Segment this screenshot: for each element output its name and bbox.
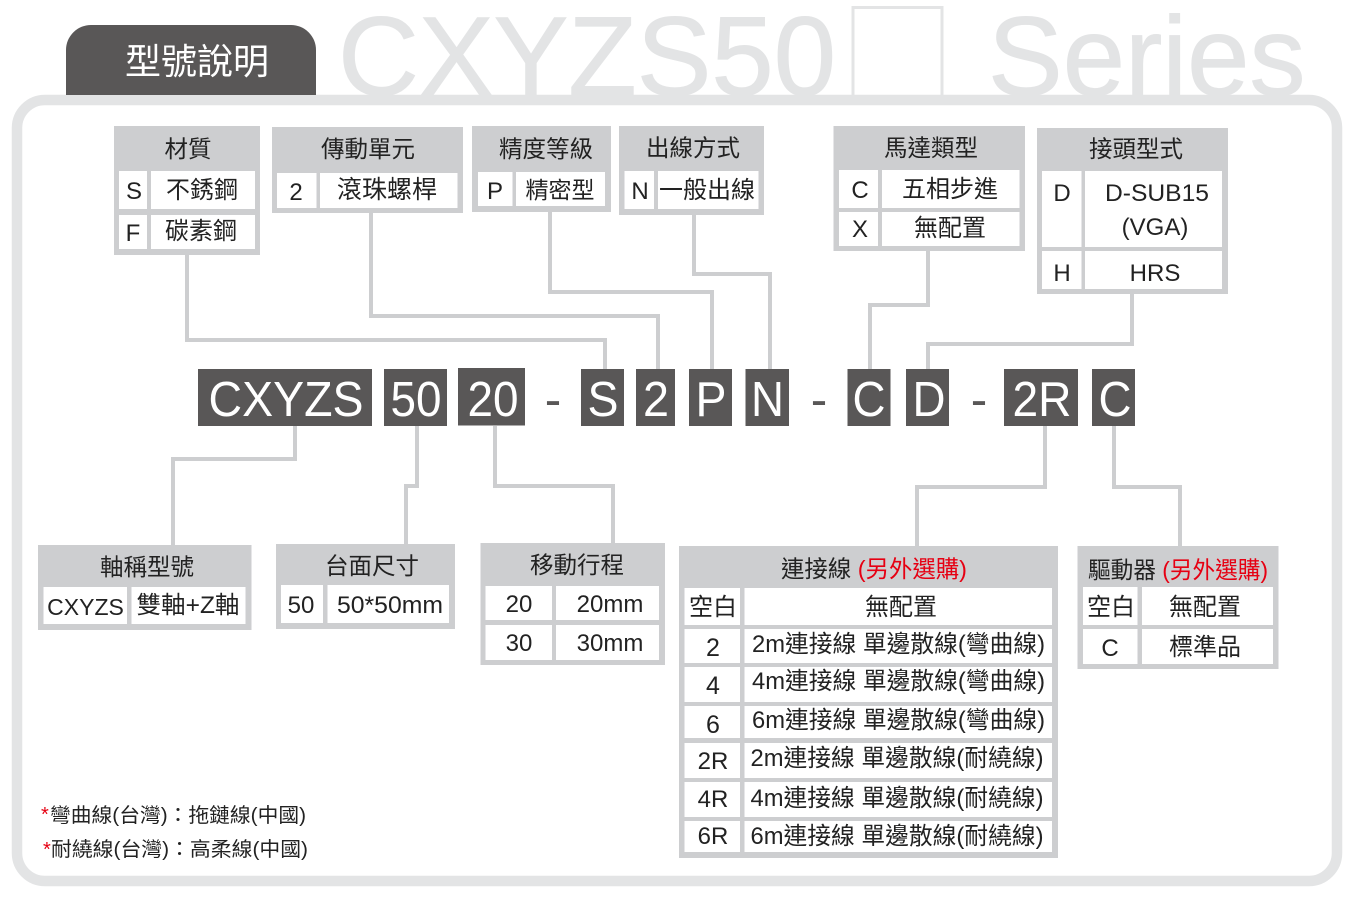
panel: connector type: D-SUB15	[1105, 180, 1209, 207]
watermark series title	[338, 0, 1305, 119]
panel: cable: 空白	[689, 594, 737, 621]
model code strip: 50	[390, 372, 442, 427]
panel: transmission unit: 傳動單元	[321, 136, 415, 162]
panel: wiring method: 一般出線	[659, 177, 755, 204]
panel: axis model	[38, 545, 252, 630]
heading tab: model description: 型號說明	[125, 41, 269, 82]
panel: connector type: HRS	[1130, 260, 1180, 287]
panel: material: 不銹鋼	[166, 177, 238, 204]
panel: motor type: 無配置	[914, 215, 986, 242]
panel: connector type: D	[1053, 180, 1071, 207]
panel: cable: 2R	[698, 748, 728, 775]
panel: driver: 標準品	[1169, 634, 1241, 661]
model code strip: CXYZS	[208, 372, 364, 427]
model code strip: 2R	[1012, 372, 1072, 427]
panel: cable: 6m連接線 單邊散線(彎曲線)	[752, 707, 1045, 734]
panel: cable: 6	[706, 711, 720, 739]
footnotes	[41, 804, 308, 861]
panel: wiring method: N	[631, 178, 649, 205]
panel: motor type: X	[852, 216, 868, 243]
panel: cable: 6m連接線 單邊散線(耐繞線)	[750, 823, 1044, 850]
model code strip: S	[588, 372, 618, 427]
panel: cable: 4m連接線 單邊散線(彎曲線)	[752, 668, 1045, 695]
model code strip: -	[545, 372, 561, 427]
panel: cable: 無配置	[865, 594, 937, 621]
panel: travel	[480, 543, 665, 665]
panel: table size	[276, 544, 455, 629]
panel: material: S	[126, 178, 142, 205]
panel: table size: 50	[288, 592, 314, 619]
panel: connector type: H	[1053, 260, 1071, 287]
panel: cable: 4R	[698, 786, 728, 813]
panel: axis model: 雙軸+Z軸	[136, 592, 240, 619]
panel: material: F	[126, 220, 140, 247]
panel: motor type: C	[851, 177, 869, 204]
panel: driver: C	[1101, 635, 1119, 662]
footnotes: 彎曲線(台灣)：拖鏈線(中國)	[50, 804, 306, 827]
panel: axis model: CXYZS	[47, 594, 124, 620]
panel: travel: 30mm	[577, 630, 643, 657]
model code strip: -	[971, 372, 987, 427]
panel: accuracy grade: P	[487, 178, 503, 205]
panel: accuracy grade: 精度等級	[499, 136, 593, 162]
panel: travel: 移動行程	[530, 552, 624, 578]
panel: cable: 2	[706, 634, 720, 662]
footnotes: *	[41, 804, 49, 826]
model code strip: C	[852, 372, 886, 427]
panel: table size: 台面尺寸	[325, 553, 419, 579]
model code strip: N	[751, 372, 784, 427]
panel: wiring method	[619, 126, 764, 215]
panel: cable	[679, 546, 1058, 858]
panel: cable: 4m連接線 單邊散線(耐繞線)	[750, 785, 1044, 812]
panel: accuracy grade: 精密型	[526, 177, 594, 203]
panel: connector type: 接頭型式	[1089, 136, 1183, 162]
panel: accuracy grade	[472, 126, 611, 212]
model code strip: C	[1098, 372, 1132, 427]
model code strip: 20	[468, 372, 518, 427]
panel: connector type	[1037, 128, 1228, 294]
model code strip: D	[912, 372, 946, 427]
model code strip: 2	[643, 372, 669, 427]
panel: travel: 20	[506, 591, 532, 618]
panel: cable: 2m連接線 單邊散線(耐繞線)	[750, 745, 1044, 772]
heading tab: model description	[66, 25, 316, 95]
panel: driver: 無配置	[1169, 594, 1241, 621]
panel: motor type	[834, 126, 1025, 251]
footnotes: 耐繞線(台灣)：高柔線(中國)	[51, 838, 308, 861]
panel: travel: 30	[506, 630, 532, 657]
panel: driver: 空白	[1087, 594, 1135, 621]
footnotes: *	[43, 839, 51, 861]
panel: cable: 連接線 (另外選購)	[781, 556, 967, 582]
panel: material	[114, 126, 260, 255]
panel: driver: 驅動器 (另外選購)	[1088, 557, 1268, 583]
panel: cable: 4	[706, 672, 720, 700]
panel: travel: 20mm	[577, 591, 643, 618]
model code strip: -	[811, 372, 827, 427]
panel: cable: 6R	[698, 823, 728, 850]
panel: material: 碳素鋼	[165, 218, 237, 245]
panel: motor type: 五相步進	[902, 176, 998, 203]
panel: wiring method: 出線方式	[646, 135, 740, 161]
panel: cable: 2m連接線 單邊散線(彎曲線)	[752, 631, 1045, 658]
panel: material: 材質	[164, 136, 212, 162]
panel: transmission unit: 2	[289, 179, 303, 206]
panel: transmission unit: 滾珠螺桿	[337, 176, 437, 204]
model code strip	[198, 368, 1135, 427]
panel: connector type: (VGA)	[1122, 214, 1188, 241]
panel: motor type: 馬達類型	[884, 135, 978, 161]
panel: transmission unit	[272, 127, 463, 213]
connector lines	[173, 212, 1180, 547]
model code strip: P	[696, 372, 726, 427]
panel: axis model: 軸稱型號	[100, 554, 194, 580]
panel: driver	[1078, 546, 1278, 669]
panel: table size: 50*50mm	[337, 592, 443, 619]
